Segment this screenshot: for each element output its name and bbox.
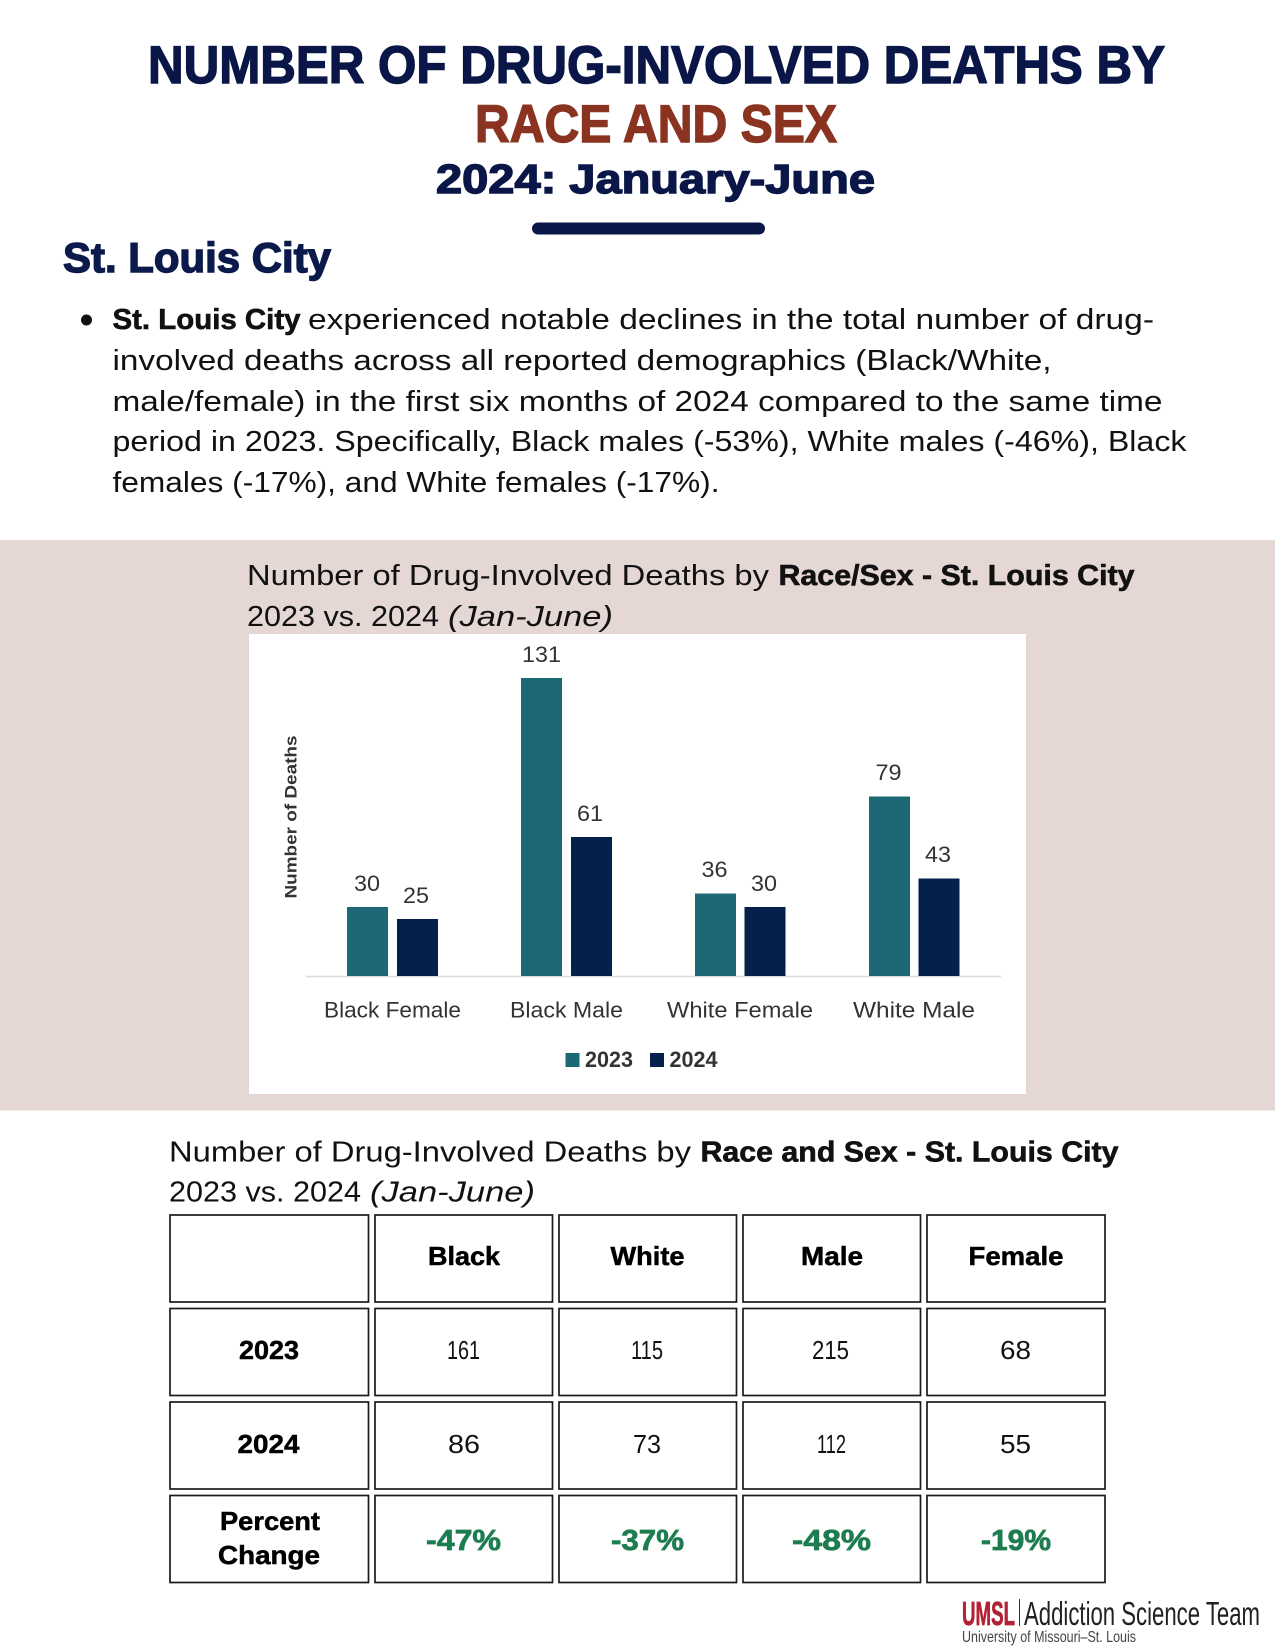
summary bullet text: period in 2023. Specifically, Black males (-53%), White males (-46%), Black: [112, 426, 1187, 458]
bars: White Male: [869, 760, 960, 976]
table row: 2023: 161: [447, 1335, 480, 1365]
legend: 2023: [585, 1047, 633, 1072]
chart title: Race/Sex - St. Louis City: [778, 560, 1134, 592]
table title: Race and Sex - St. Louis City: [700, 1136, 1118, 1168]
title: [148, 36, 1165, 202]
summary bullet text: involved deaths across all reported demographics (Black/White,: [112, 345, 1052, 377]
category labels: White Female: [667, 998, 813, 1022]
table row: 2023: 2023: [239, 1335, 299, 1365]
title: RACE AND SEX: [475, 95, 837, 154]
chart title: [247, 560, 1134, 633]
table row: header: Black: [428, 1241, 501, 1271]
category labels: Black Male: [510, 998, 623, 1022]
table row: header: Female: [968, 1241, 1064, 1271]
table row: header: Male: [801, 1241, 863, 1271]
title: NUMBER OF DRUG-INVOLVED DEATHS BY: [148, 36, 1165, 95]
table row: percent change: -48%: [792, 1525, 871, 1557]
chart title: (Jan-June): [448, 601, 613, 633]
table row: percent change: -37%: [611, 1525, 684, 1557]
table row: percent change: -47%: [426, 1525, 501, 1557]
bars: White Male: 79: [876, 760, 902, 785]
title: 2024: January-June: [436, 156, 875, 202]
chart title: Number of Drug-Involved Deaths by: [247, 560, 770, 592]
bars: Black Female: [347, 871, 438, 976]
bars: Black Male: 61: [577, 801, 603, 826]
chart title: 2023 vs. 2024: [247, 601, 439, 633]
summary bullet text: females (-17%), and White females (-17%).: [112, 467, 720, 499]
table row: 2023: 68: [1000, 1335, 1031, 1365]
table row: percent change: -19%: [981, 1525, 1051, 1557]
legend: 2024: [670, 1047, 718, 1072]
table title: 2023 vs. 2024: [169, 1176, 361, 1208]
y axis label: Number of Deaths: [282, 736, 300, 898]
table row: 2024: 73: [633, 1429, 661, 1459]
table title: Number of Drug-Involved Deaths by: [169, 1136, 692, 1168]
summary bullet text: male/female) in the first six months of 2024 compared to the same time: [112, 386, 1162, 418]
table row: 2024: 55: [1000, 1429, 1031, 1459]
table row: header: White: [610, 1241, 684, 1271]
table row: percent change: Percent: [220, 1506, 320, 1536]
category labels: Black Female: [324, 998, 461, 1022]
bars: Black Female: 30: [354, 871, 380, 896]
bars: White Female: [695, 857, 786, 976]
summary bullet text: experienced notable declines in the total number of drug-: [308, 304, 1154, 336]
table row: percent change: Change: [218, 1540, 320, 1570]
table row: percent change: [170, 1496, 1105, 1582]
category labels: [324, 998, 975, 1022]
bars: White Female: 36: [702, 857, 728, 882]
panel: chart band: [0, 540, 1275, 1110]
table title: [169, 1136, 1118, 1208]
bars: Black Female: 25: [403, 883, 429, 908]
bars: Black Male: 131: [522, 642, 561, 667]
logo: UMSL Addiction Science Team: [962, 1595, 1260, 1646]
table row: 2023: 115: [631, 1335, 663, 1365]
table title: (Jan-June): [370, 1176, 535, 1208]
table row: 2023: [170, 1308, 1105, 1396]
title underline bar: [532, 222, 765, 234]
bars: White Male: 43: [925, 842, 951, 867]
table row: 2023: 215: [812, 1335, 849, 1365]
bar chart: [249, 634, 1026, 1094]
bars: Black Male: [521, 642, 612, 976]
summary bullet text: St. Louis City: [112, 304, 300, 336]
bars: White Female: 30: [751, 871, 777, 896]
table row: 2024: 86: [448, 1429, 480, 1459]
legend: [566, 1047, 718, 1072]
category labels: White Male: [853, 998, 975, 1022]
table row: 2024: 112: [817, 1429, 846, 1459]
summary bullet text: [81, 304, 1187, 499]
table row: header: [170, 1215, 1105, 1302]
table row: 2024: 2024: [238, 1429, 300, 1459]
data table: [170, 1215, 1105, 1582]
table row: 2024: [170, 1402, 1105, 1489]
logo: UMSL Addiction Science Team: University of Missouri–St. Louis: [962, 1629, 1136, 1646]
logo: UMSL Addiction Science Team: UMSL: [962, 1595, 1015, 1632]
heading: St. Louis City: St. Louis City: [63, 234, 332, 281]
